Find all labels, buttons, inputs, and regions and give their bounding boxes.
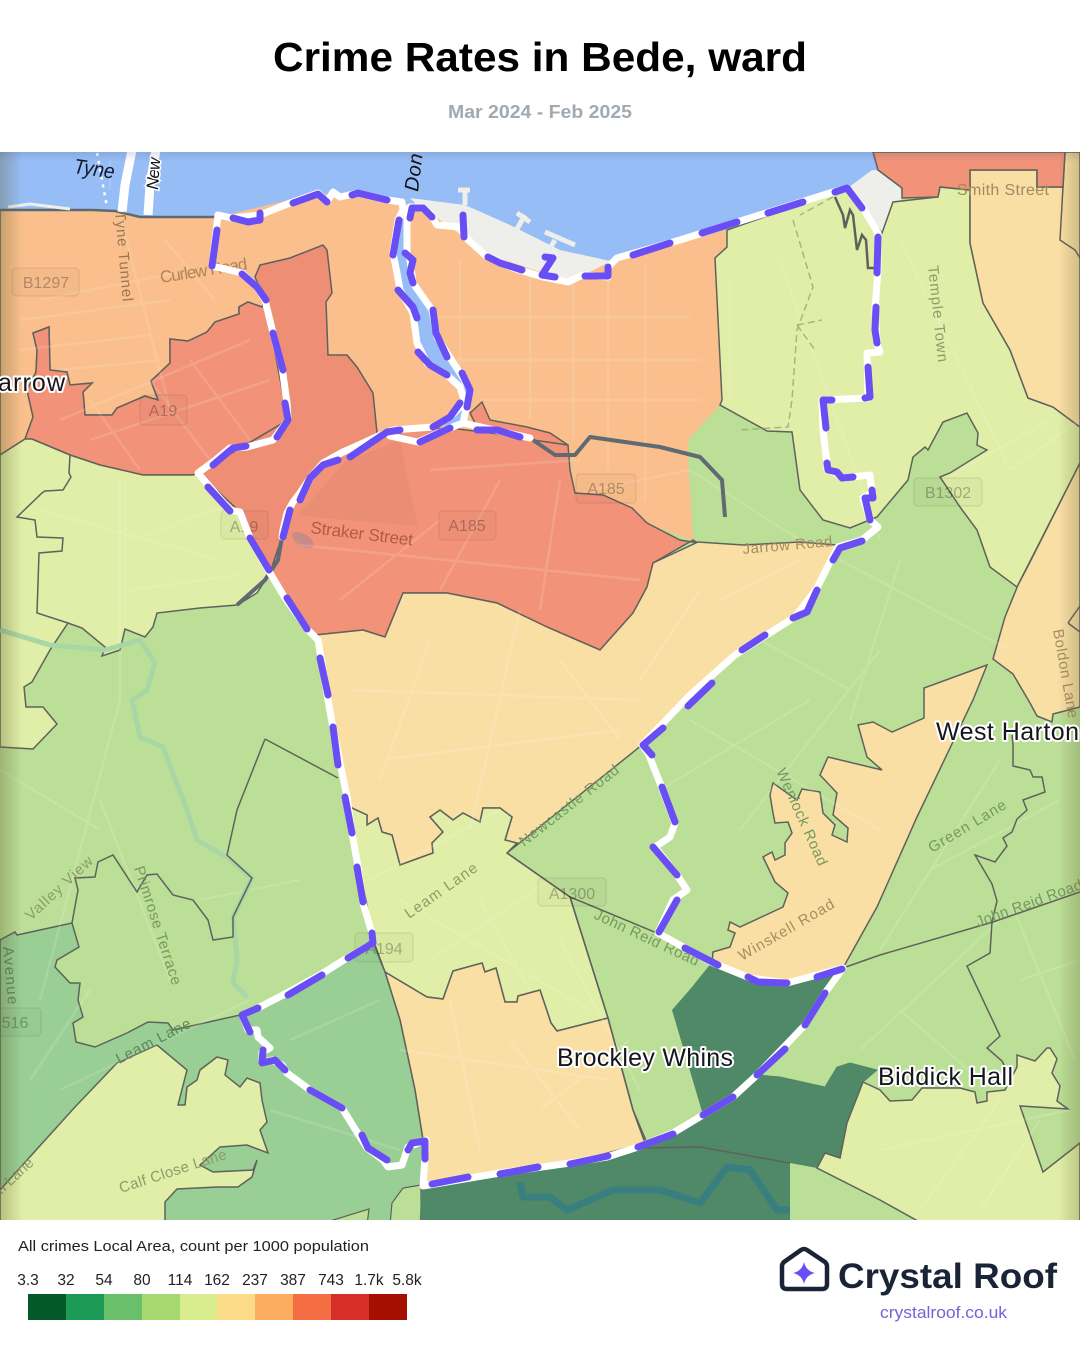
road shield: A19 south: A19 [230,519,258,536]
region: Boldon peach [993,463,1080,722]
legend scale labels: 237 [242,1272,268,1289]
region: Jarrow red [25,300,288,475]
streets and minor roads [0,160,1080,1210]
road shield: A19 south [221,511,268,539]
region: central red [202,244,380,567]
legend scale labels: 32 [57,1272,75,1289]
label: John Reid Road west: John Reid Road [591,906,702,970]
legend scale labels: 5.8k [392,1272,422,1289]
label: Jarrow Road: Jarrow Road [742,533,833,558]
region: north-east red [873,152,1065,198]
label: Winskell Road: Winskell Road [736,896,838,964]
street labels [0,152,1080,1201]
vignette right [1058,152,1080,1220]
vignette edges [0,152,22,1220]
logo: Crystal Roof [782,1249,1057,1322]
legend scale labels: 3.3 [17,1272,39,1289]
shoreline squiggle: north-east [835,197,877,268]
label: Tyne: Tyne [72,155,116,184]
base region: light green [0,175,1080,1220]
label: Primrose Terrace: Primrose Terrace [130,864,185,987]
quay land [410,170,902,284]
vignette top [0,152,1080,162]
region: river-side red sliver [470,402,568,445]
label: Curlew Road: Curlew Road [159,254,249,287]
region: Leam Lane pale green [345,797,608,1031]
region: Winskell peach [712,665,987,983]
region: south-east light green [790,1163,816,1220]
legend scale labels: 80 [133,1272,151,1289]
region boundaries [17,187,1080,1163]
region: north-west orange [0,210,265,455]
road shield: A194: A194 [365,941,403,958]
road: west tunnel approach [237,537,282,605]
place label: Biddick Hall: Biddick Hall [878,1063,1013,1091]
road shield: B1297: B1297 [23,275,69,292]
road shield: A1516 [0,1008,41,1036]
footpaths: Harton park dashed tracks [737,197,833,430]
label: New: New [143,155,164,190]
stream: west river [0,630,252,997]
label: Calf Close Lane: Calf Close Lane [117,1146,229,1197]
region: west mid green [0,923,425,1225]
shaded block in Straker Street region [298,440,418,526]
water channel between ward lines [393,205,470,432]
road shield: A1300 [538,878,606,906]
label: Valley View: Valley View [22,853,97,924]
road shield: B1297 [12,268,79,296]
region: central orange [212,193,727,543]
region: small bottom patches [332,1184,422,1220]
place label: Jarrow: arrow [0,369,66,397]
region: dark green north of ward [672,963,840,1115]
place label: Brockley Whins: Brockley Whins [557,1044,733,1072]
road shield: A194 [355,933,413,962]
piers [458,188,576,248]
small pond [292,532,314,548]
place label: West Harton: West Harton [936,718,1079,746]
ward outline: purple dashes [208,188,878,1184]
legend scale labels [17,1272,422,1289]
title: Crime Rates in Bede, ward [273,34,807,80]
label: Tyne Tunnel: Tyne Tunnel [111,211,136,302]
region: dark green south [420,1063,877,1225]
Tyne shoreline and tunnels [0,150,218,217]
ward outline: white casing [198,188,880,1186]
legend scale labels: 743 [318,1272,344,1289]
road shield: A185 east [576,474,636,503]
region: Calf Close pale green [0,1045,268,1225]
label: Leam Lane west: Leam Lane [113,1015,194,1068]
label: Temple Town: Temple Town [924,265,951,363]
road shield: A19: A19 [149,403,177,420]
label: Don: Don [401,152,428,193]
road shield: A185 east: A185 [587,481,625,498]
stream: south river [520,1167,790,1210]
region: Jarrow west pale green [0,439,270,749]
road shield: A19 [140,395,187,425]
road shield: B1302 [914,478,982,506]
choropleth map [0,150,1080,1225]
legend colour bar [28,1294,407,1320]
road shield: A1300: A1300 [549,886,595,903]
subtitle: date range: Mar 2024 - Feb 2025 [448,101,632,122]
road shield: B1302: B1302 [925,485,971,502]
road shield: A1516: 516 [2,1015,28,1032]
legend scale labels: 387 [280,1272,306,1289]
region: Biddick Hall pale green [817,1048,1080,1225]
legend scale labels: 114 [168,1272,193,1289]
road: Tyne tunnel approach [533,437,725,517]
region: Brockley Whins peach [385,963,645,1186]
region: north-east peach [970,152,1080,427]
legend scale labels: 54 [95,1272,113,1289]
legend scale labels: 162 [204,1272,230,1289]
road shield: A185 west: A185 [448,518,486,535]
region: Simonside peach [315,542,837,865]
legend scale labels: 1.7k [354,1272,384,1289]
legend [17,1238,422,1320]
region: Harton pale green [715,187,1080,587]
label: Straker Street: Straker Street [310,518,414,550]
icon: house with star [782,1249,827,1289]
legend title: All crimes Local Area, count per 1000 population [18,1238,369,1255]
label: Wenlock Road: Wenlock Road [772,766,831,869]
label: Green Lane: Green Lane [925,797,1009,856]
road shield: A185 west [439,511,496,540]
label: Leam Lane east: Leam Lane [402,860,481,922]
water: river Tyne [0,152,878,261]
label: Newcastle Road: Newcastle Road [516,762,623,850]
region: Straker Street red [270,428,698,650]
wordmark: Crystal Roof [838,1257,1057,1296]
website url: crystalroof.co.uk [880,1303,1008,1322]
label: Smith Street: Smith Street [957,182,1050,199]
